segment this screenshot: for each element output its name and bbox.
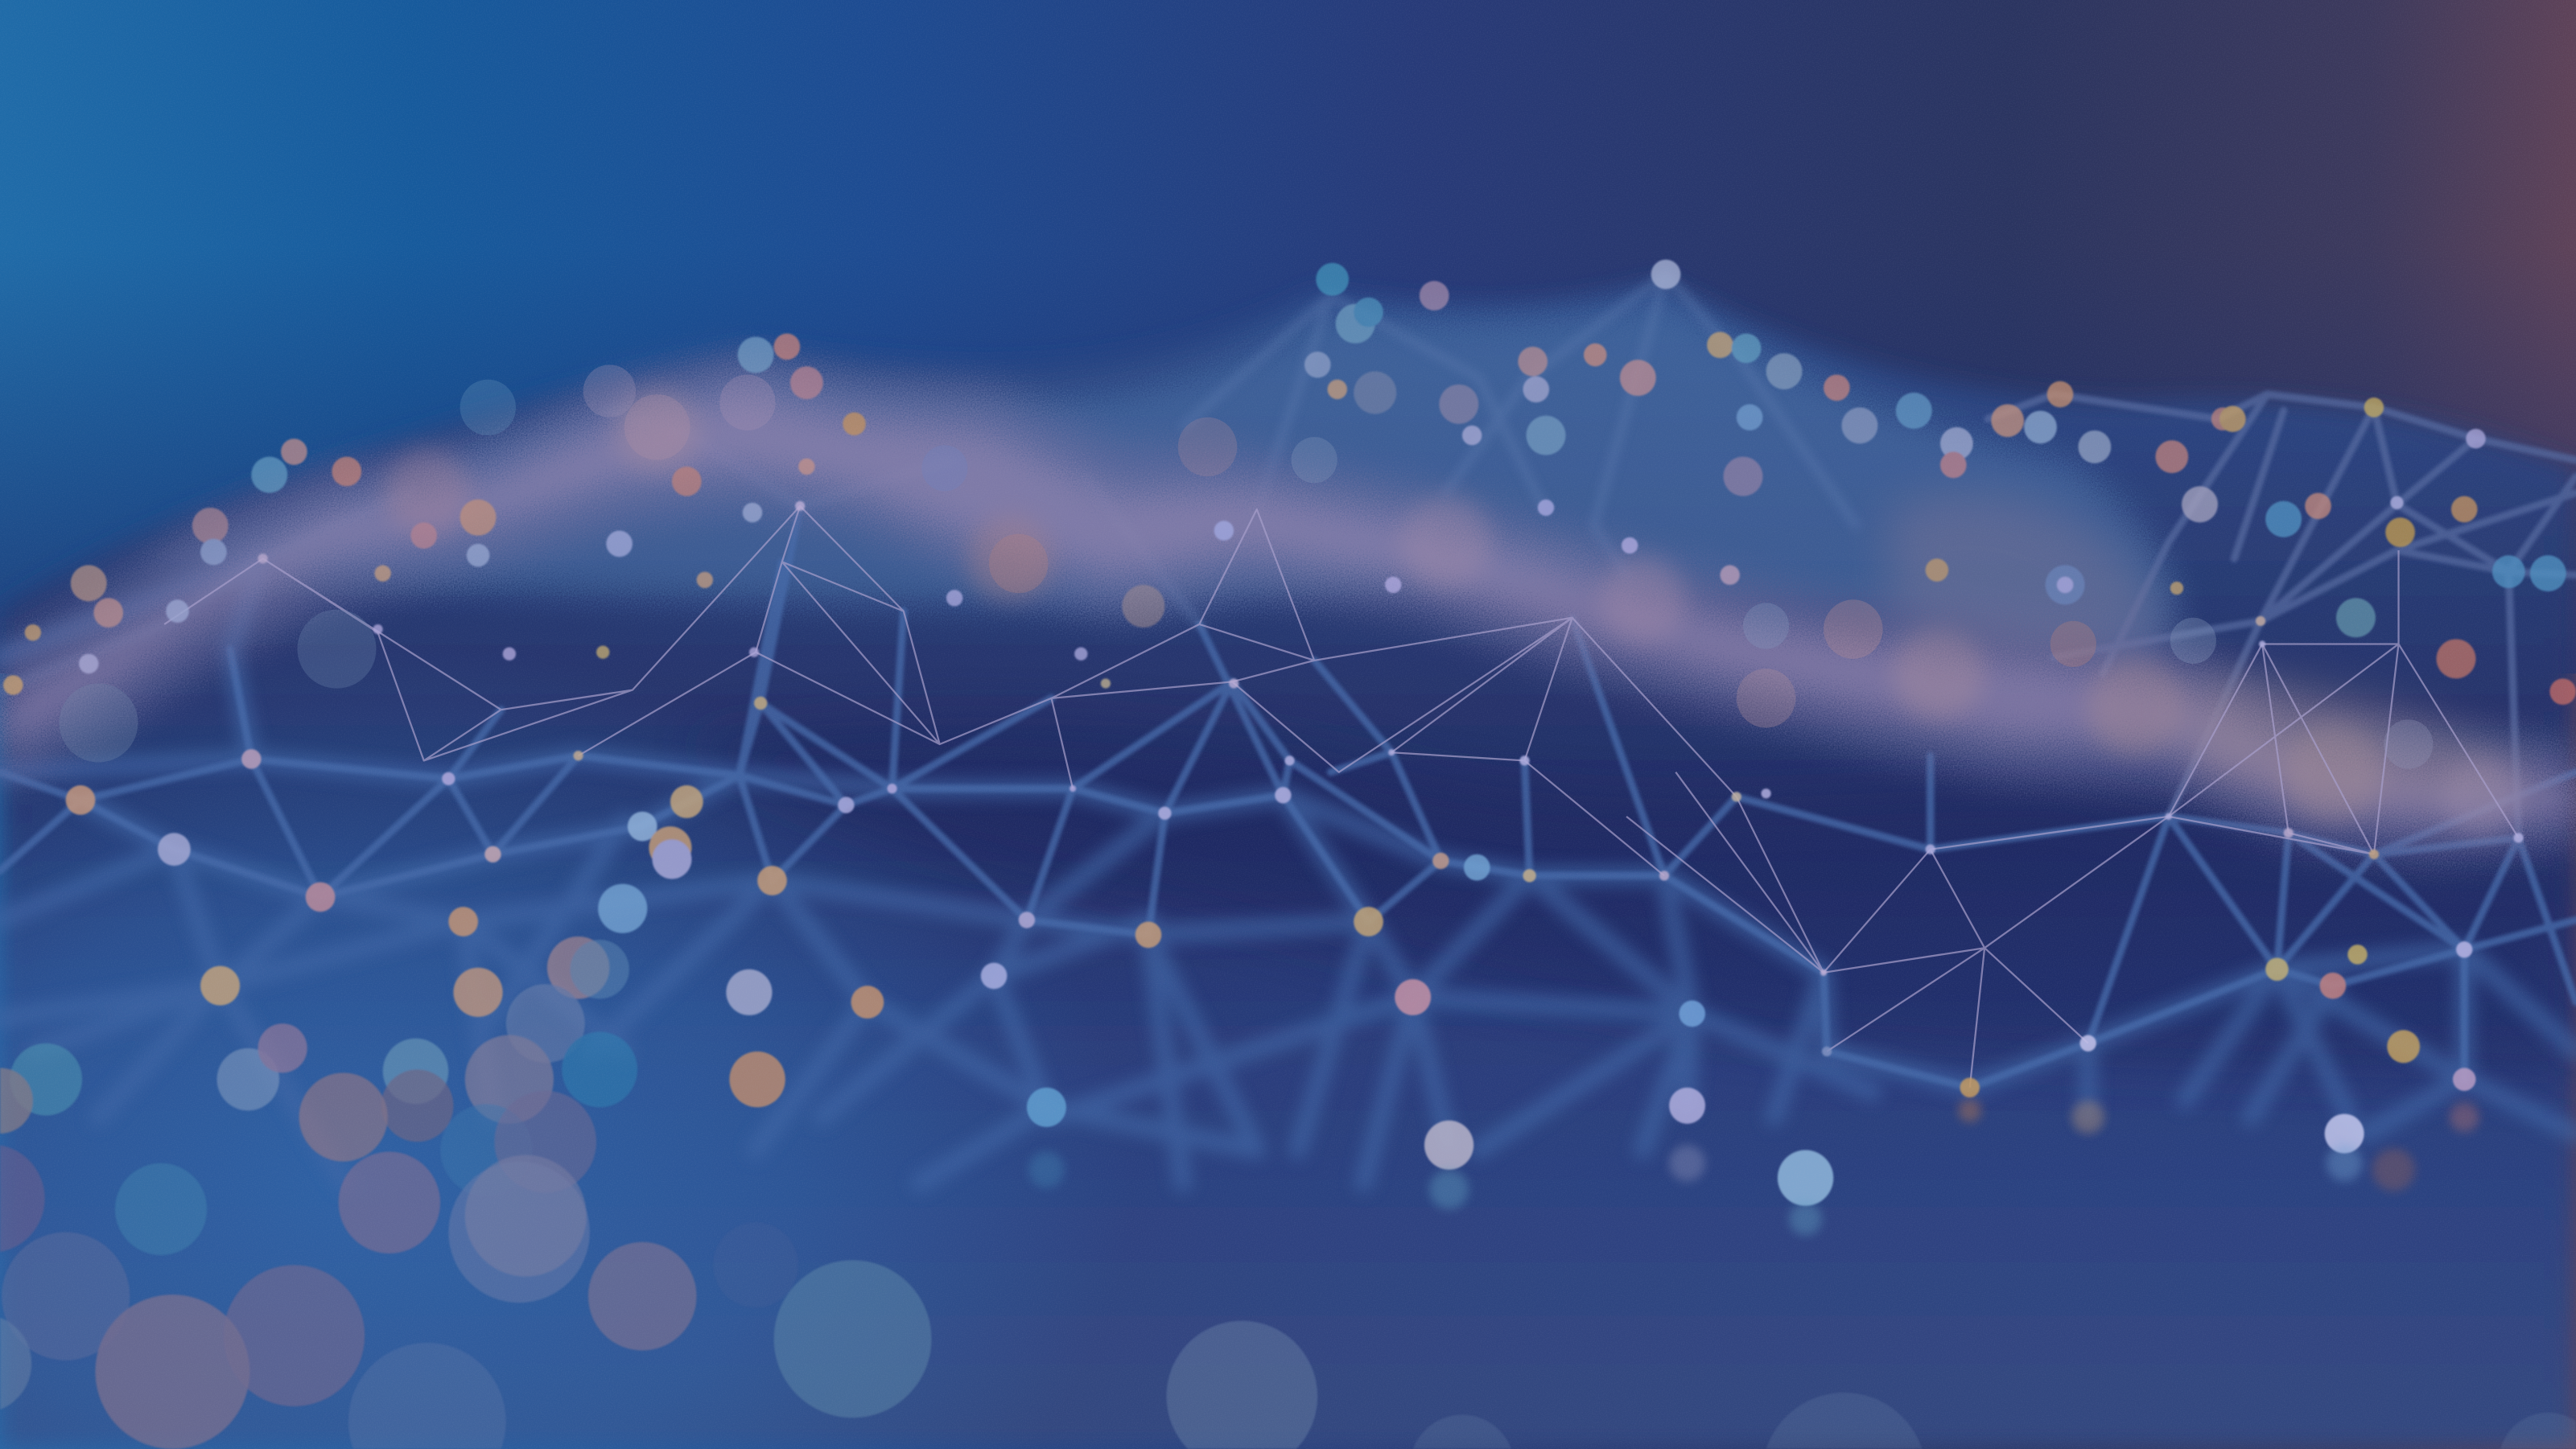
network nodes and ridge points <box>3 260 2576 705</box>
warm cloud glow right <box>1890 494 2169 651</box>
sky darkening toward horizon <box>0 246 2576 673</box>
mesh fine foreground lines <box>164 506 2519 1088</box>
particle cloud core <box>0 394 2576 821</box>
mesh mid-weight struts <box>0 506 2576 1088</box>
blue haze over ridge <box>148 296 2174 657</box>
foreground bokeh left <box>0 936 2576 1449</box>
warm cloud lower right <box>2185 673 2546 802</box>
left side blue glow <box>0 640 1150 1449</box>
upper right mesh struts <box>1988 394 2576 838</box>
warm blobs inside cloud <box>385 388 2520 836</box>
mesh junction nodes <box>66 616 2524 1206</box>
particle cloud haze <box>0 353 2576 862</box>
far ridge mesh lines <box>0 274 1857 690</box>
back mesh blurred wide lines <box>0 558 2576 1183</box>
dark valley shadow <box>690 718 2576 1085</box>
node reflections on floor <box>1028 1099 2479 1236</box>
far background bokeh <box>59 364 2433 769</box>
